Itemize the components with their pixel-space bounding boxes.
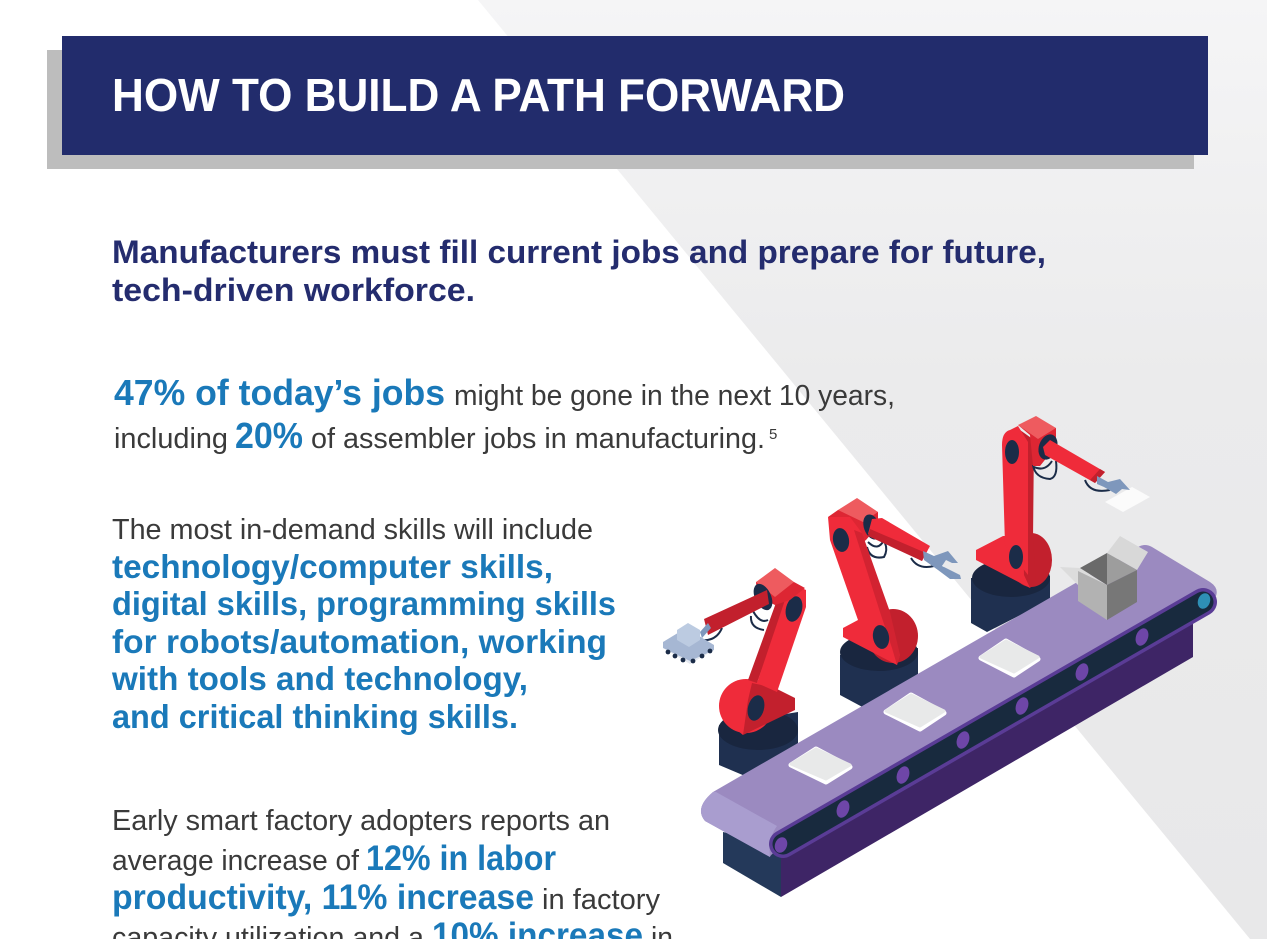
text block: jobs statistic: 20% [235,415,303,456]
text block: jobs statistic [114,372,895,456]
text block: early adopters: productivity, 11% increase [112,878,534,917]
text block: jobs statistic: 5 [769,426,777,443]
text block: jobs statistic: might be gone in the next 10 years, [454,380,895,412]
header banner [47,36,1208,169]
robot 2 (middle) [828,498,961,710]
title: HOW TO BUILD A PATH FORWARD [112,69,845,121]
text block: early adopters: Early smart factory adopters reports an [112,805,610,837]
text block: early adopters: in factory [542,884,660,916]
text block: early adopters: average increase of [112,845,360,877]
text block: in-demand skills: and critical thinking skills. [112,698,518,735]
illustration: robot arm assembly line [663,416,1217,897]
text block: early adopters: 12% in labor [366,839,556,878]
text block: in-demand skills: The most in-demand skills will include [112,514,593,546]
gripper [923,551,961,579]
text block: jobs statistic: including [114,423,228,455]
paper sheet [1105,487,1150,512]
conveyor pads [791,641,1038,782]
text block: in-demand skills: for robots/automation, working [112,623,607,660]
text block: in-demand skills: with tools and technology, [111,660,528,697]
text block: in-demand skills: technology/computer skills, [112,548,553,585]
subheading [112,234,1046,308]
conveyor belt [701,545,1217,897]
gripper [1097,476,1130,494]
subheading: tech-driven workforce. [112,272,475,308]
text block: jobs statistic: of assembler jobs in manufacturing. [311,423,765,455]
held chip [663,628,714,662]
text block: jobs statistic: 47% of today’s jobs [114,372,445,413]
open cardboard box [1060,536,1148,620]
text block: in-demand skills [111,514,616,735]
text block: in-demand skills: digital skills, programming skills [112,585,616,622]
subheading: Manufacturers must fill current jobs and prepare for future, [112,234,1046,270]
background diagonal panel [478,0,1267,939]
robot 1 (front) [663,568,806,776]
text block: early adopters [112,805,673,939]
robot 3 (back) [971,416,1150,632]
